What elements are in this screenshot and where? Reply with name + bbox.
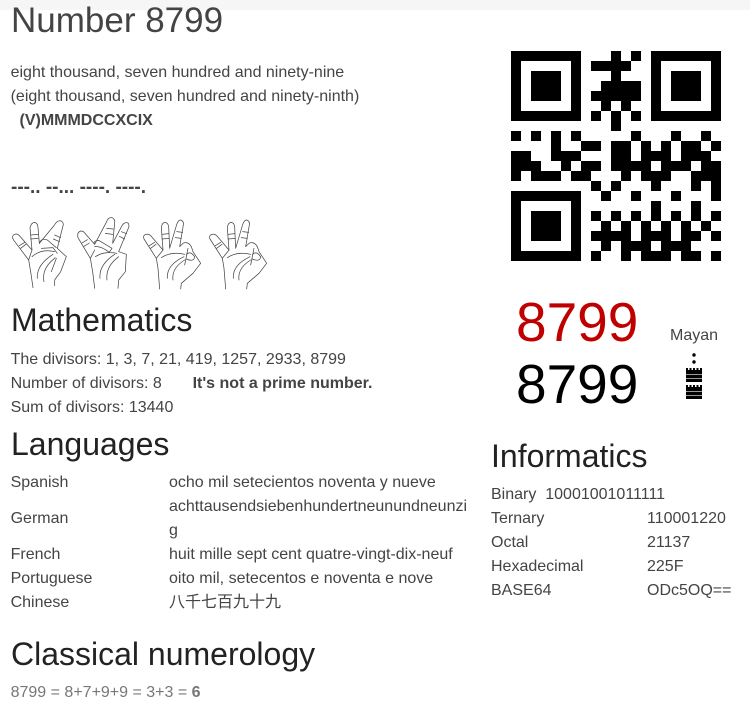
hand 8 [13, 221, 66, 288]
Mayan label: Mayan [670, 326, 718, 344]
number names: (V)MMMDCCXCIX [19, 112, 153, 129]
languages table: g [169, 522, 178, 539]
informatics table: BASE64 [491, 582, 551, 599]
languages table: ocho mil setecientos noventa y nueve [169, 474, 436, 491]
informatics table: Hexadecimal [491, 558, 583, 575]
informatics table: 225F [647, 558, 683, 575]
informatics table: Octal [491, 534, 528, 551]
number names: eight thousand, seven hundred and ninety-nine [11, 64, 344, 81]
languages table: achttausendsiebenhundertneunundneunzi [169, 498, 467, 515]
red number: 8799 [516, 291, 638, 353]
heading: Informatics: Informatics [491, 438, 647, 474]
languages table: Spanish [11, 474, 68, 491]
informatics table [491, 486, 731, 599]
heading: Mathematics: Mathematics [11, 302, 192, 338]
languages table: Portuguese [11, 570, 92, 587]
informatics table: 21137 [647, 534, 690, 551]
informatics table: Ternary [491, 510, 544, 527]
heading: Languages: Languages [11, 426, 169, 462]
informatics table: Binary 10001001011111 [491, 486, 665, 503]
mathematics facts: Number of divisors: 8 [11, 374, 162, 392]
languages table: French [11, 546, 60, 563]
mathematics facts: Sum of divisors: 13440 [11, 398, 173, 416]
hand 9 [144, 220, 201, 289]
informatics table: ODc5OQ== [647, 582, 731, 599]
hand 7 [78, 218, 129, 288]
QR code [511, 51, 721, 261]
mathematics facts [11, 350, 372, 416]
mathematics facts: It's not a prime number. [193, 374, 372, 392]
numerology sum: 8799 = 8+7+9+9 = 3+3 = 6 [11, 684, 201, 701]
mathematics facts: The divisors: 1, 3, 7, 21, 419, 1257, 2933, 8799 [11, 350, 346, 368]
morse code: ---.. --... ----. ----. [11, 177, 146, 198]
number names [11, 64, 359, 129]
icon: Mayan numeral [686, 353, 702, 399]
icon: sign language hands [12, 217, 267, 290]
title: Number 8799 [11, 1, 223, 40]
languages table: oito mil, setecentos e noventa e nove [169, 570, 433, 587]
languages table: Chinese [11, 594, 69, 611]
black number: 8799 [516, 353, 638, 415]
languages table: huit mille sept cent quatre-vingt-dix-neuf [169, 546, 453, 563]
languages table [11, 474, 467, 611]
informatics table: 110001220 [647, 510, 726, 527]
top band [0, 0, 750, 10]
number names: (eight thousand, seven hundred and ninety-ninth) [11, 88, 359, 105]
languages table: 八千七百九十九 [169, 594, 281, 611]
hand 9 [210, 220, 267, 289]
languages table: German [11, 510, 68, 527]
heading: Classical numerology: Classical numerology [11, 636, 315, 672]
